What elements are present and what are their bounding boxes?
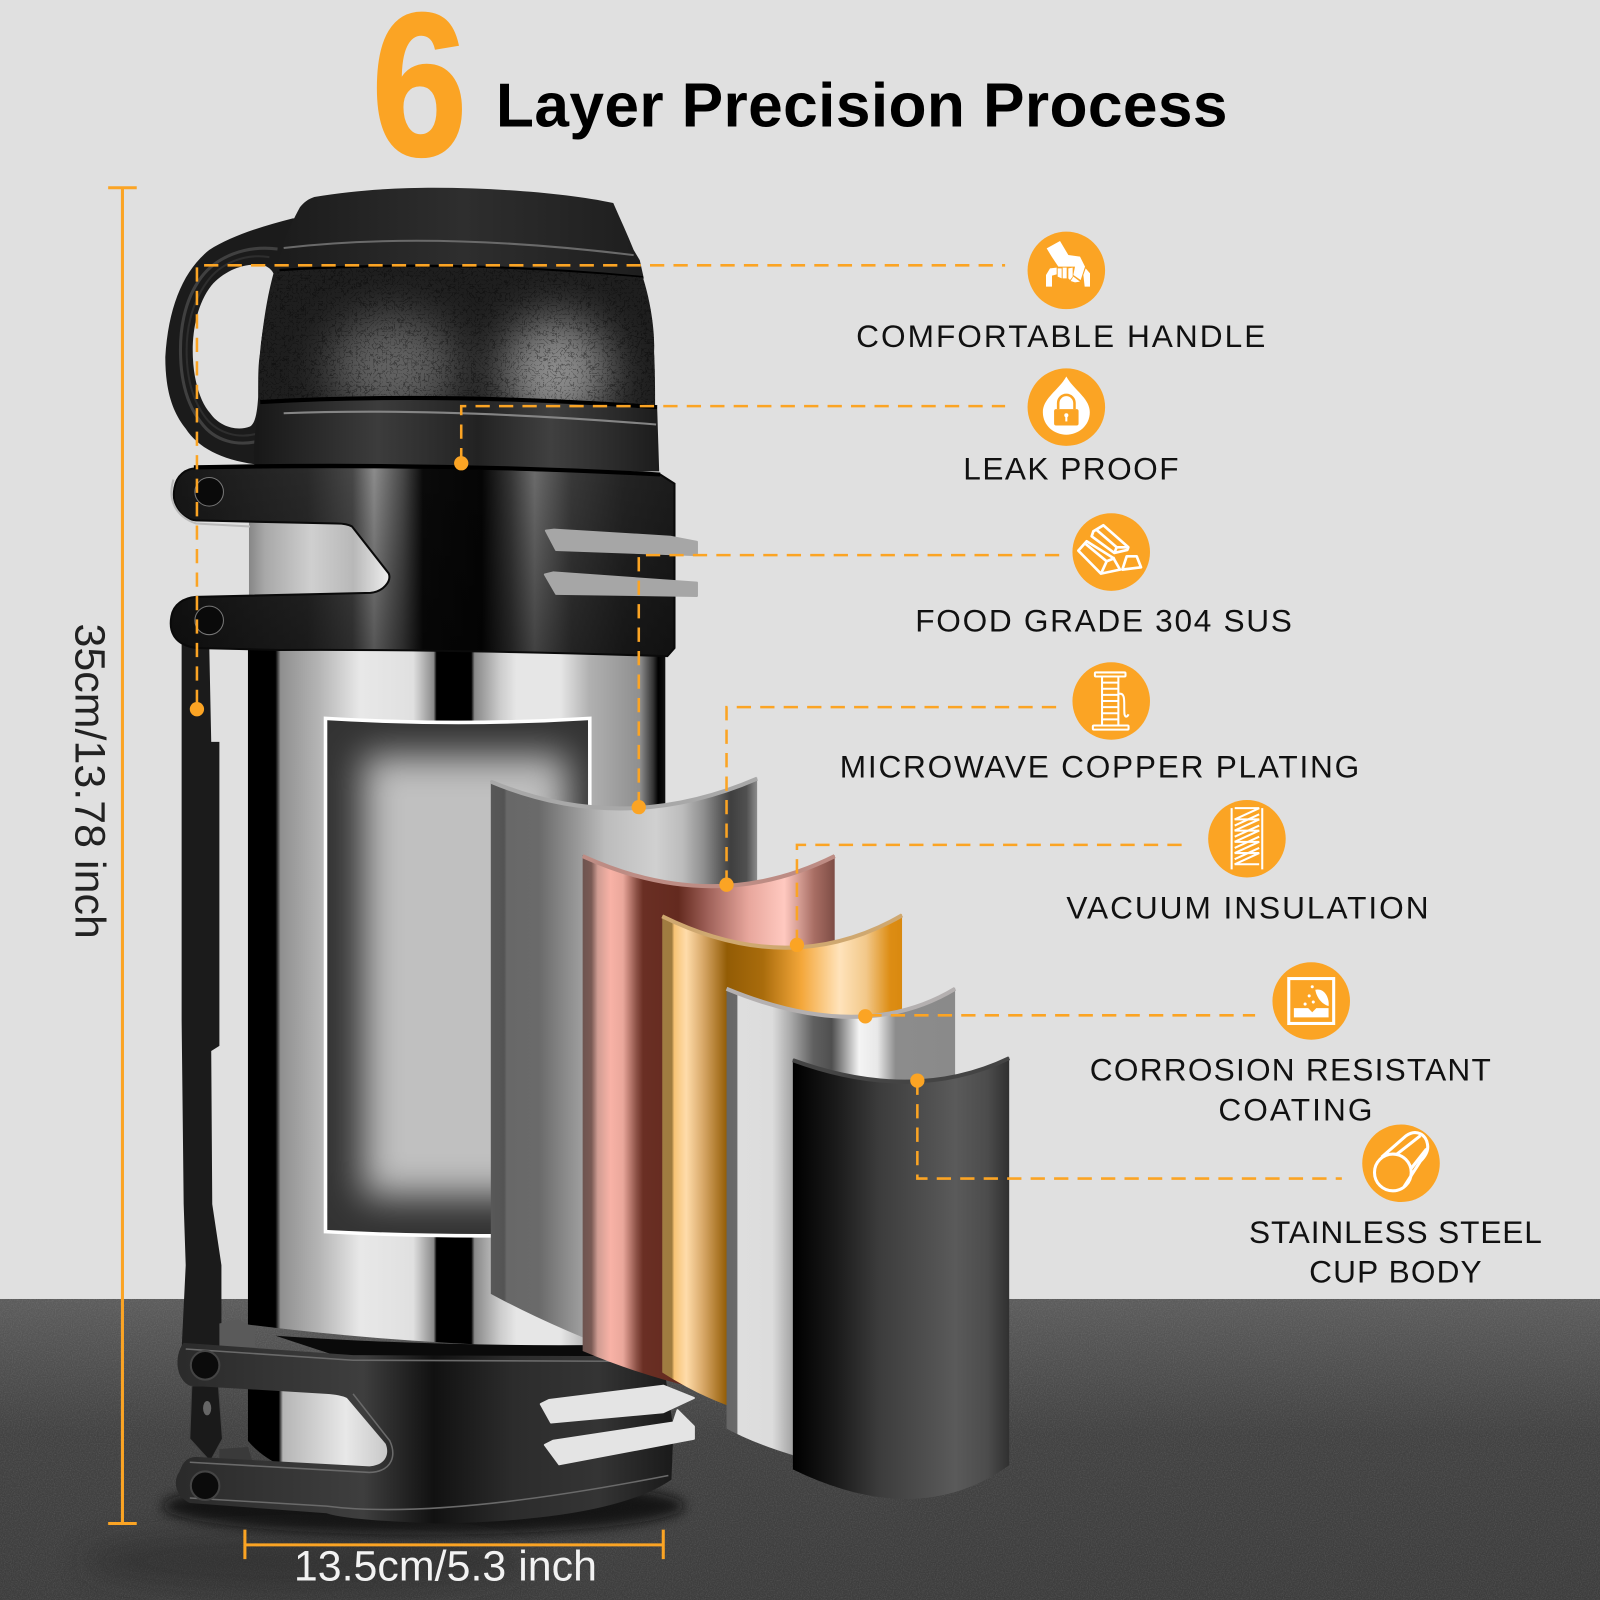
width label: 13.5cm/5.3 inch	[294, 1543, 597, 1591]
cup handle	[165, 218, 298, 465]
title	[371, 0, 1228, 199]
label: FOOD GRADE 304 SUS	[915, 603, 1292, 639]
bottom collar white tabs	[541, 1386, 694, 1464]
feature: food grade steel	[915, 513, 1292, 639]
cup lid	[276, 188, 644, 279]
bottom collar	[176, 1336, 673, 1523]
feature: leak proof	[963, 368, 1179, 487]
layer 5: outer cup body	[793, 1057, 1009, 1499]
feature: stainless steel cup body	[1249, 1124, 1542, 1290]
label: LEAK PROOF	[963, 451, 1179, 487]
height dimension	[66, 188, 137, 1523]
icon: wire spool	[1072, 662, 1150, 740]
width dimension	[245, 1530, 663, 1591]
feature: corrosion resistant coating	[1090, 962, 1491, 1127]
icon: corrosion square	[1272, 962, 1350, 1040]
title text: Layer Precision Process	[496, 72, 1228, 141]
cutaway window	[326, 718, 590, 1236]
leather textured cup	[259, 267, 656, 405]
callout leader lines	[197, 265, 1342, 1179]
label: MICROWAVE COPPER PLATING	[840, 749, 1359, 785]
icon: metal ingots	[1072, 513, 1150, 591]
icon: hand on handle	[1028, 232, 1105, 309]
feature: microwave copper plating	[840, 662, 1359, 785]
icon: insulation batt	[1208, 800, 1286, 878]
cup lower band	[254, 398, 659, 471]
callout dots	[190, 456, 924, 1088]
label: VACUUM INSULATION	[1066, 889, 1429, 925]
base steel window	[248, 1383, 388, 1474]
label line 1: STAINLESS STEEL	[1249, 1214, 1542, 1250]
icon: steel rod	[1362, 1124, 1440, 1202]
floor	[0, 1299, 1600, 1600]
feature: comfortable handle	[856, 232, 1265, 354]
top collar	[171, 466, 674, 656]
height label: 35cm/13.78 inch	[66, 623, 114, 939]
flask illustration	[165, 188, 697, 1523]
label line 2: COATING	[1218, 1091, 1372, 1127]
carrying strap	[182, 643, 255, 1469]
icon: droplet with lock	[1028, 368, 1105, 446]
top collar grey tabs	[545, 530, 697, 596]
layer 1: stainless inner wall	[491, 778, 757, 1357]
layer rims	[491, 779, 1009, 1082]
steel bottle body	[248, 516, 665, 1349]
label: COMFORTABLE HANDLE	[856, 318, 1265, 354]
feature: vacuum insulation	[1066, 800, 1429, 925]
label line 1: CORROSION RESISTANT	[1090, 1052, 1491, 1088]
collar lug holes	[171, 478, 250, 635]
label line 2: CUP BODY	[1309, 1254, 1482, 1290]
layer 2: copper plating	[583, 855, 835, 1388]
layer 3: vacuum gold layer	[662, 914, 902, 1405]
layer 4: silver coating	[727, 988, 955, 1455]
